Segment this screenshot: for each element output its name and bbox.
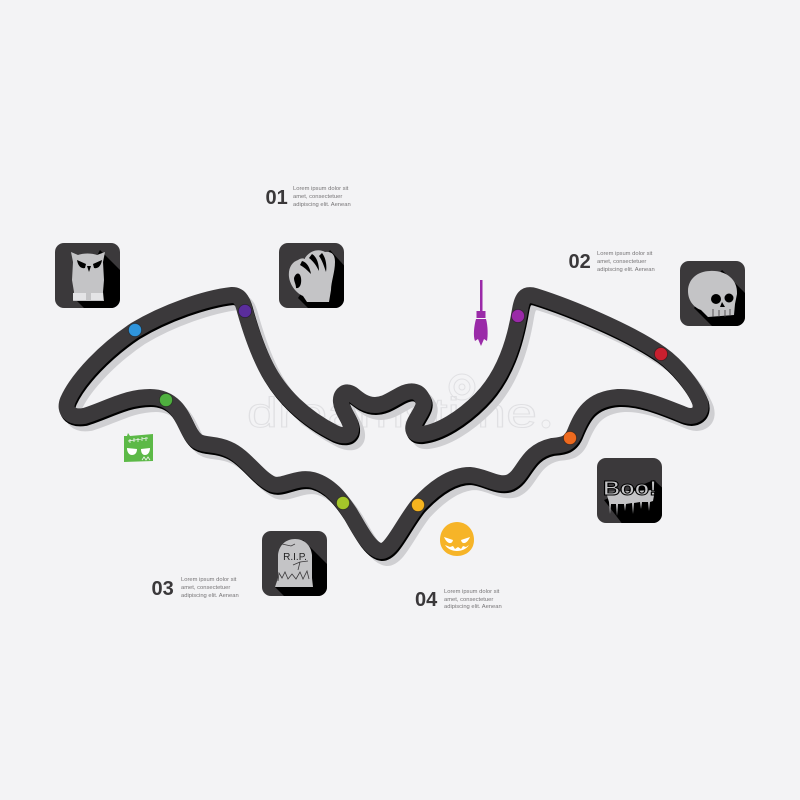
block 03: adipiscing elit. Aenean [181,593,239,599]
block 04: 04 [415,589,438,611]
icon: tombstone: R.I.P. [283,552,307,563]
icon: zombie hand [279,243,344,308]
icon: boo: Boo! [603,478,657,500]
watermark [247,374,550,436]
block 02: amet, consectetuer [597,259,646,265]
block 03: amet, consectetuer [181,585,230,591]
block 01: Lorem ipsum dolor sit [293,186,349,192]
block 02 [568,251,655,273]
bat-shaped track [67,295,707,558]
block 03: Lorem ipsum dolor sit [181,577,237,583]
icon: boo [597,458,662,523]
icon: skull [680,261,745,326]
block 03: 03 [152,578,174,600]
block 01: amet, consectetuer [293,194,342,200]
icon: frankenstein [124,433,153,462]
block 02: 02 [568,251,591,273]
watermark: dreamstime [247,389,537,436]
block 01: adipiscing elit. Aenean [293,202,351,208]
block 04: Lorem ipsum dolor sit [444,589,500,595]
track markers [128,304,668,512]
block 04: adipiscing elit. Aenean [444,604,502,610]
block 03 [152,577,239,600]
block 01 [266,186,351,209]
icon: pumpkin [440,522,474,556]
block 01: 01 [266,187,288,209]
block 04 [415,589,502,611]
block 02: Lorem ipsum dolor sit [597,251,653,257]
icon: tombstone [262,531,327,596]
block 02: adipiscing elit. Aenean [597,267,655,273]
block 04: amet, consectetuer [444,597,493,603]
icon: broom [474,280,488,346]
icon: owl [55,243,120,308]
